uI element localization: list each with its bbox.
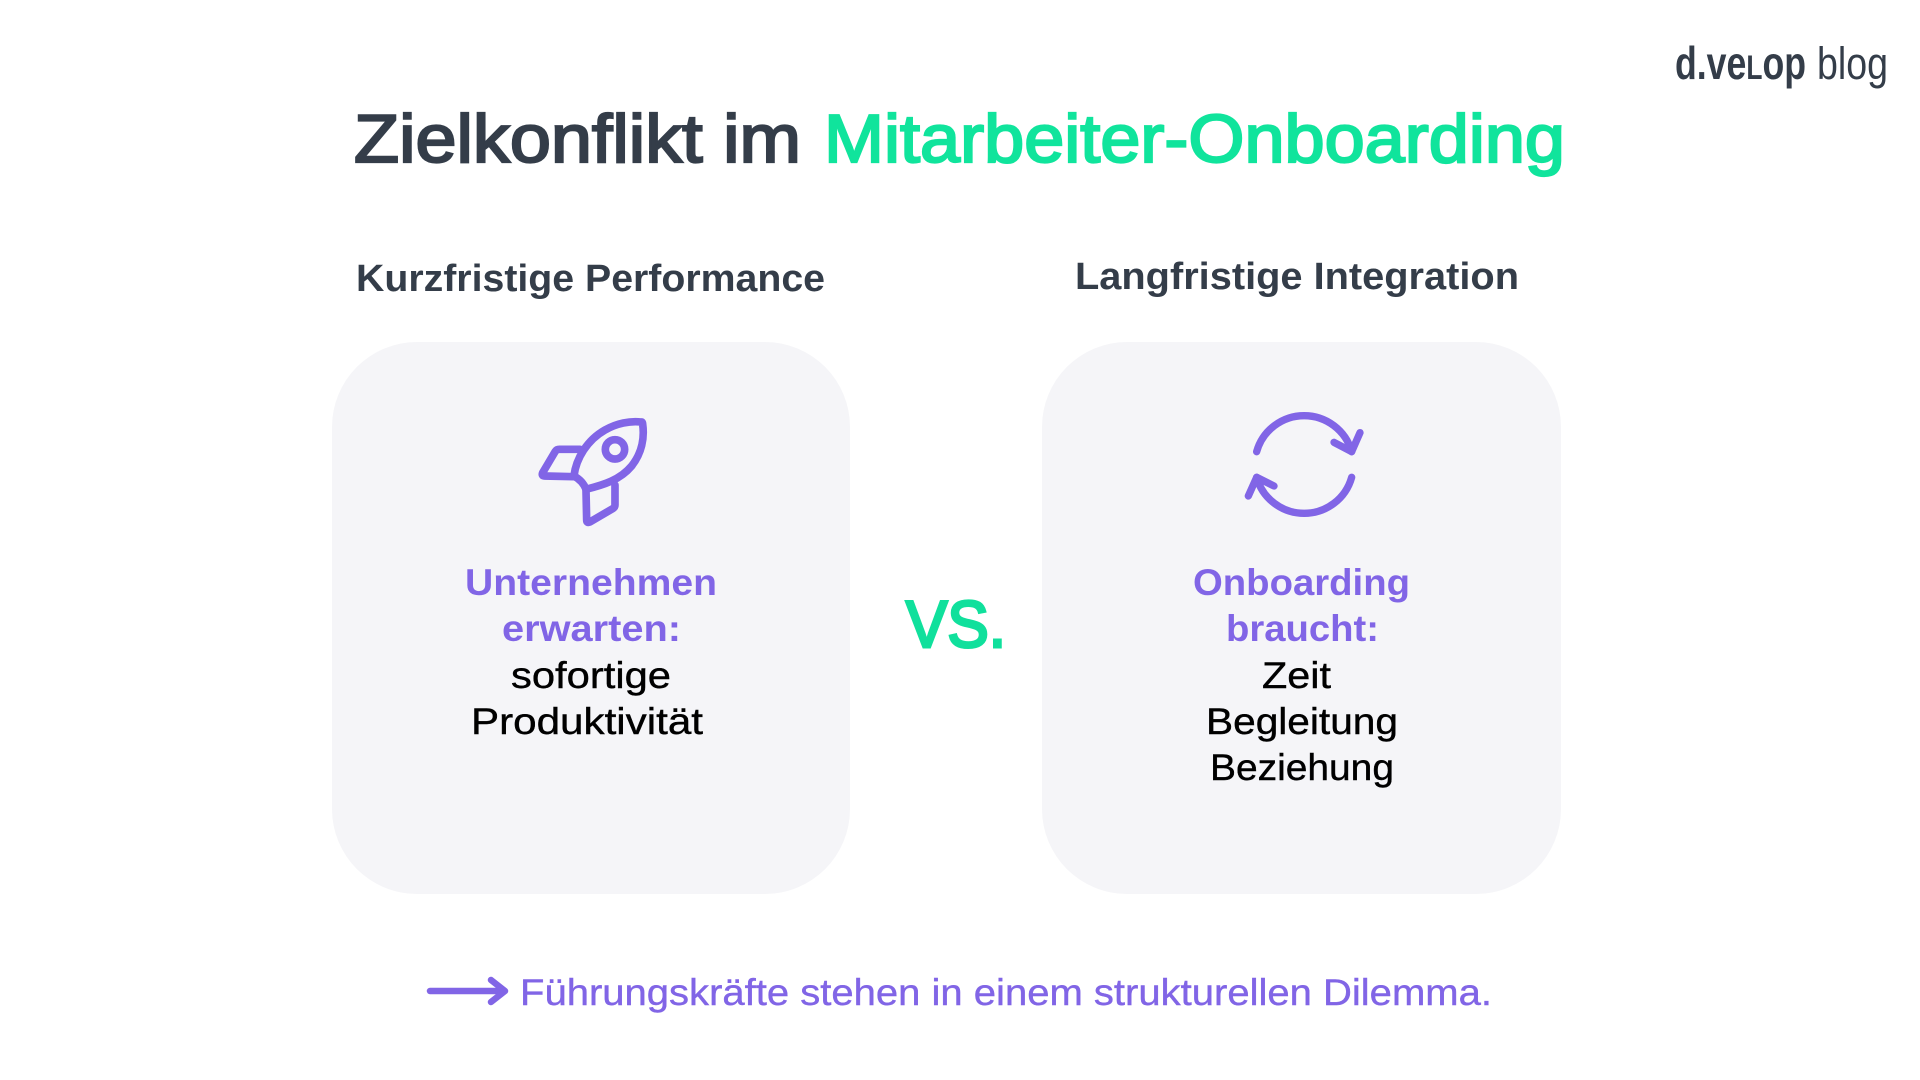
logo: d.velop blog: d.veLop — [1675, 37, 1806, 89]
text: Onboarding braucht: Begleitung — [1206, 701, 1398, 742]
arrow — [430, 980, 505, 1002]
panel: long-term integration — [1042, 342, 1561, 894]
text: Unternehmen erwarten: Produktivität — [471, 701, 704, 742]
heading: Kurzfristige Performance: Kurzfristige Performance — [356, 258, 825, 300]
title: Mitarbeiter-Onboarding — [824, 101, 1565, 177]
text: Unternehmen erwarten: Unternehmen — [465, 562, 717, 603]
text: Unternehmen erwarten: sofortige — [511, 655, 671, 696]
panel: short-term performance — [332, 342, 850, 894]
footer statement: Führungskräfte stehen in einem strukturellen Dilemma. — [520, 972, 1492, 1013]
text: Unternehmen erwarten — [465, 562, 717, 742]
logo: d.velop blog — [1675, 37, 1888, 89]
text: Onboarding braucht — [1193, 562, 1410, 788]
title — [354, 101, 1565, 177]
heading: Langfristige Integration: Langfristige Integration — [1075, 256, 1519, 298]
icon: rocket — [542, 422, 643, 522]
logo: d.velop blog: blog — [1817, 38, 1888, 89]
icon: sync arrows — [1248, 416, 1360, 513]
text: Onboarding braucht: Onboarding — [1193, 562, 1410, 603]
title: Zielkonflikt im — [354, 101, 801, 177]
text: Onboarding braucht: Zeit — [1262, 655, 1332, 696]
text: Onboarding braucht: Beziehung — [1210, 747, 1394, 788]
text: Onboarding braucht: braucht: — [1226, 608, 1379, 649]
text: Unternehmen erwarten: erwarten: — [502, 608, 681, 649]
vs label: VS. — [906, 587, 1006, 661]
